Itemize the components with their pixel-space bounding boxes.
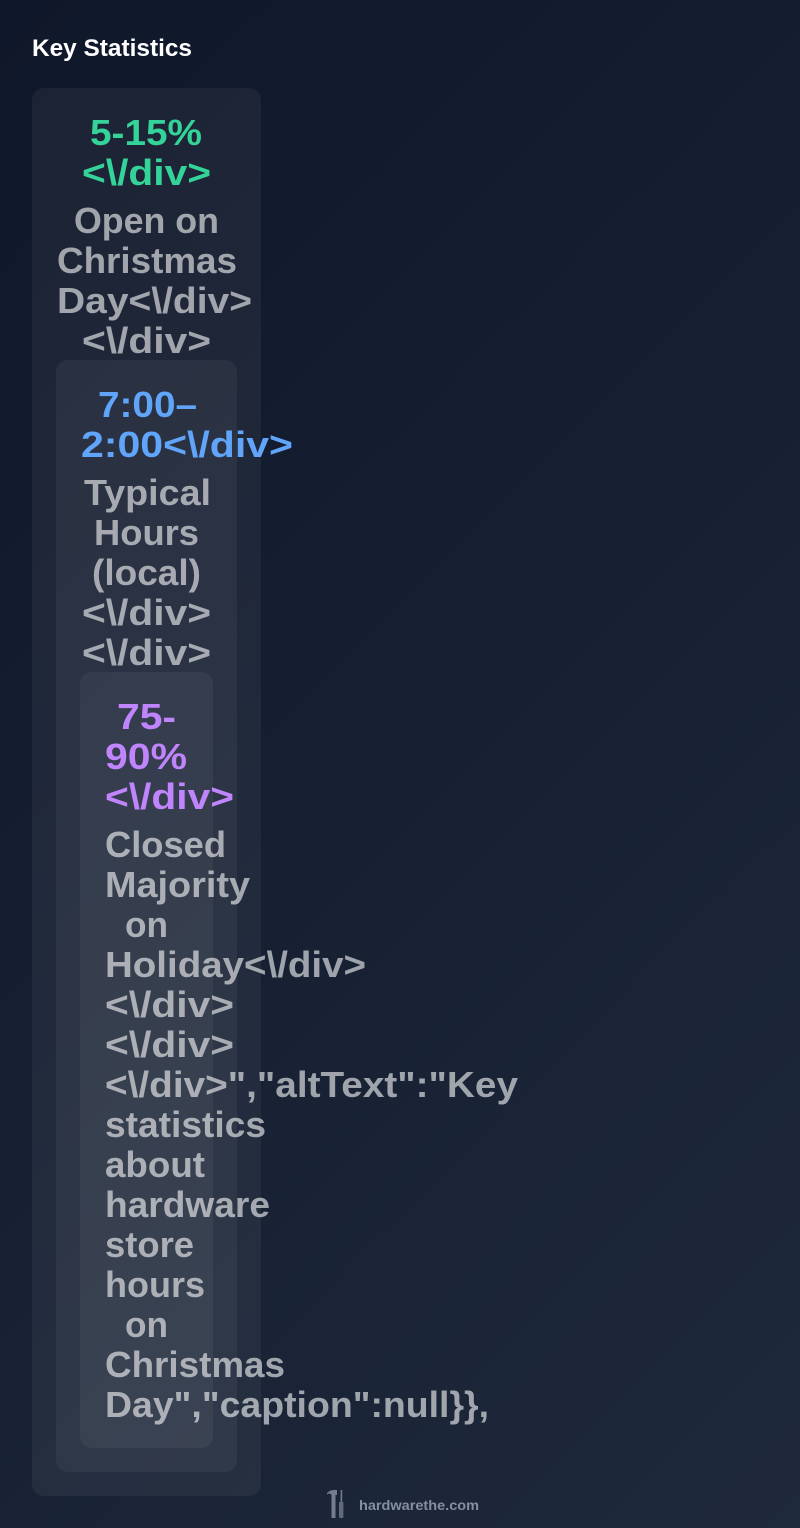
- stat value: 75-90%: <\/div>: [105, 776, 234, 817]
- stat value: 7:00-2:00: 7:00–: [98, 384, 197, 425]
- stat label: open on Christmas Day: <\/div>: [82, 320, 211, 361]
- stat label: closed majority and overflow text: [105, 824, 518, 1425]
- stat label: closed majority and overflow text: hours: [105, 1264, 205, 1305]
- stat value: 75-90%: [105, 696, 234, 817]
- stat label: closed majority and overflow text: hardware: [105, 1184, 270, 1225]
- panel: middle stat card: [56, 360, 237, 1472]
- stat label: typical hours: <\/div>: [82, 632, 211, 673]
- stat label: typical hours: (local): [92, 552, 201, 593]
- stat label: typical hours: [82, 472, 211, 673]
- stat label: closed majority and overflow text: on: [125, 904, 168, 945]
- stat label: typical hours: Typical: [84, 472, 211, 513]
- panel: inner stat card: [80, 672, 213, 1448]
- stat label: open on Christmas Day: Day<\/div>: [57, 280, 252, 321]
- stat label: closed majority and overflow text: statistics: [105, 1104, 266, 1145]
- stat label: typical hours: Hours: [94, 512, 199, 553]
- title: Key Statistics: [32, 35, 192, 62]
- stat label: closed majority and overflow text: Closed: [105, 824, 226, 865]
- stat label: open on Christmas Day: Open on: [74, 200, 219, 241]
- stat value: 75-90%: 90%: [105, 736, 187, 777]
- stat label: closed majority and overflow text: Day","caption":null}},: [105, 1384, 489, 1425]
- stat value: 5-15%: <\/div>: [82, 152, 211, 193]
- stat label: closed majority and overflow text: on: [125, 1304, 168, 1345]
- stat label: closed majority and overflow text: store: [105, 1224, 194, 1265]
- stat label: open on Christmas Day: Christmas: [57, 240, 237, 281]
- stat value: 5-15%: 5-15%: [90, 112, 202, 153]
- stat label: open on Christmas Day: [57, 200, 252, 361]
- stat label: closed majority and overflow text: <\/div>: [105, 1024, 234, 1065]
- stat label: typical hours: <\/div>: [82, 592, 211, 633]
- stat label: closed majority and overflow text: Christmas: [105, 1344, 285, 1385]
- icon: hammer and screwdriver: [327, 1490, 343, 1518]
- stat label: closed majority and overflow text: <\/div>: [105, 984, 234, 1025]
- stat label: closed majority and overflow text: Holiday<\/div>: [105, 944, 366, 985]
- stat value: 7:00-2:00: 2:00<\/div>: [81, 424, 293, 465]
- panel: outer stat card: [32, 88, 261, 1496]
- stat label: closed majority and overflow text: about: [105, 1144, 205, 1185]
- stat value: 75-90%: 75-: [117, 696, 176, 737]
- stat label: closed majority and overflow text: <\/div>","altText":"Key: [105, 1064, 518, 1105]
- stat value: 5-15%: [82, 112, 211, 193]
- stat label: closed majority and overflow text: Majority: [105, 864, 250, 905]
- stat value: 7:00-2:00: [81, 384, 293, 465]
- footer: site name: hardwarethe.com: [359, 1497, 479, 1513]
